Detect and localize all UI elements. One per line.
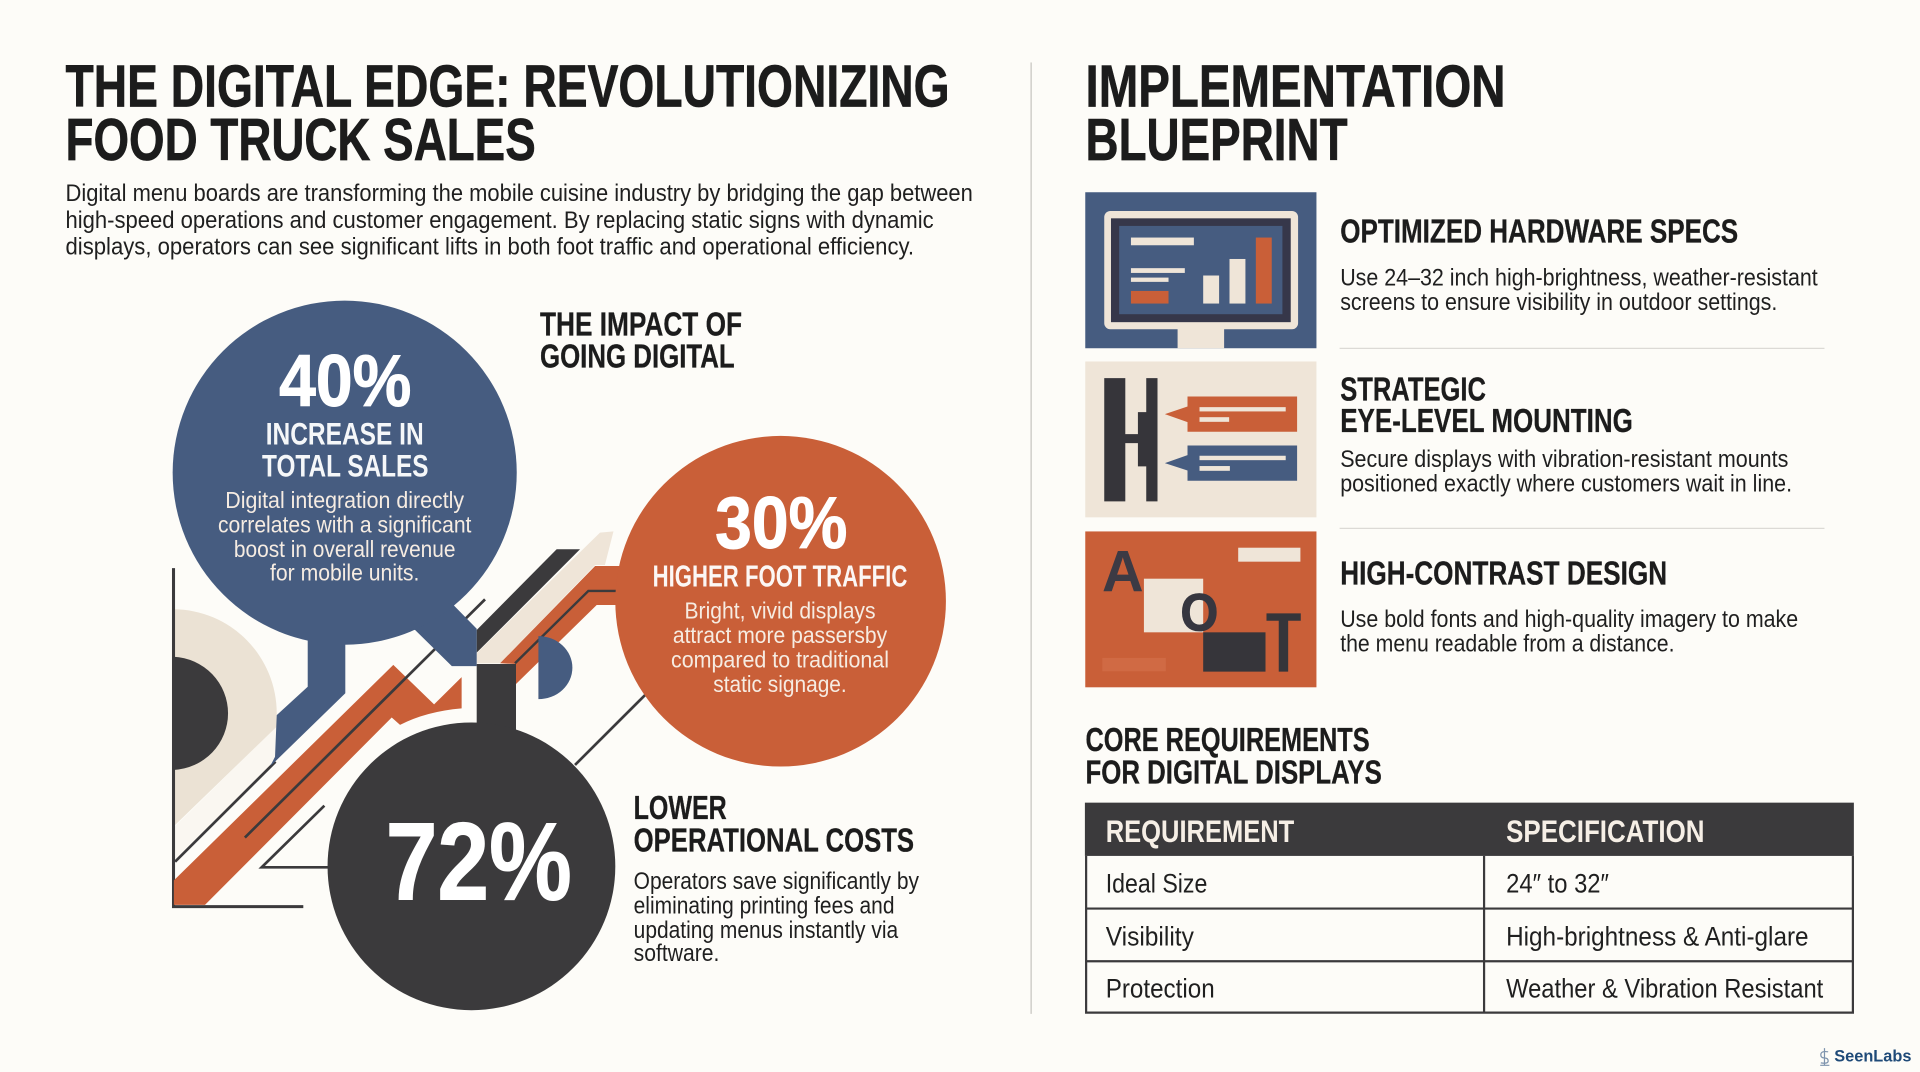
table header bbox=[1085, 803, 1854, 856]
axis lines bbox=[174, 568, 303, 907]
hardware specs text bbox=[1340, 213, 1818, 316]
row: visibility bbox=[1106, 921, 1809, 951]
stat description: Digital integration directly bbox=[225, 487, 464, 513]
stat description: static signage. bbox=[713, 671, 847, 697]
row: protection bbox=[1106, 973, 1824, 1003]
stat description: attract more passersby bbox=[673, 622, 887, 648]
design text: the menu readable from a distance. bbox=[1340, 630, 1674, 657]
stat label: INCREASE IN bbox=[266, 415, 424, 451]
30 percent value: 30% bbox=[715, 481, 847, 564]
thin line in orange band bbox=[515, 591, 618, 663]
40 percent value: 40% bbox=[279, 339, 411, 422]
mounting text: Secure displays with vibration-resistant mounts bbox=[1340, 446, 1788, 473]
stat label bbox=[262, 415, 429, 483]
hardware specs text: Use 24–32 inch high-brightness, weather-resistant bbox=[1340, 264, 1818, 291]
design text: Use bold fonts and high-quality imagery to make bbox=[1340, 606, 1798, 633]
blue bubble bbox=[270, 605, 477, 767]
row: ideal size bbox=[1106, 869, 1609, 899]
lower operational costs text: LOWER bbox=[634, 790, 727, 827]
stat: 30 percent bbox=[615, 436, 946, 767]
stat description: boost in overall revenue bbox=[234, 536, 456, 562]
hardware specs text: screens to ensure visibility in outdoor settings. bbox=[1340, 289, 1777, 316]
title: THE DIGITAL EDGE: REVOLUTIONIZING bbox=[66, 53, 950, 120]
cream band bbox=[477, 531, 613, 663]
logo icon bbox=[1820, 1048, 1829, 1065]
impact heading: GOING DIGITAL bbox=[540, 338, 735, 375]
row: visibility: Visibility bbox=[1106, 921, 1194, 951]
dark band bbox=[477, 549, 580, 653]
logo: SeenLabs: SeenLabs bbox=[1834, 1047, 1911, 1066]
mounting text: STRATEGIC bbox=[1340, 371, 1486, 408]
corner line bbox=[262, 806, 331, 867]
stat description bbox=[671, 597, 889, 697]
requirements heading: FOR DIGITAL DISPLAYS bbox=[1086, 755, 1382, 792]
hardware specs text: OPTIMIZED HARDWARE SPECS bbox=[1340, 213, 1738, 250]
lower operational costs text: updating menus instantly via bbox=[634, 917, 899, 944]
table header: SPECIFICATION bbox=[1506, 813, 1704, 849]
stat label: HIGHER FOOT TRAFFIC bbox=[653, 560, 907, 594]
impact graphic bbox=[173, 301, 946, 1010]
mounting text: EYE-LEVEL MOUNTING bbox=[1340, 403, 1633, 440]
stat description: correlates with a significant bbox=[218, 512, 472, 538]
stat description: compared to traditional bbox=[671, 646, 889, 672]
blueprint heading: IMPLEMENTATION bbox=[1086, 53, 1506, 120]
requirements heading: CORE REQUIREMENTS bbox=[1086, 722, 1370, 759]
lower operational costs text: Operators save significantly by bbox=[634, 868, 919, 895]
decorative geometric backdrop bbox=[174, 531, 645, 907]
lower operational costs text: software. bbox=[634, 940, 719, 967]
long diagonal lines bbox=[175, 599, 485, 862]
icon: monitor bbox=[1085, 192, 1316, 348]
impact heading: THE IMPACT OF bbox=[540, 307, 742, 344]
mounting text: positioned exactly where customers wait in line. bbox=[1340, 471, 1792, 498]
icon: high-contrast letters: A bbox=[1102, 539, 1144, 604]
stat label: TOTAL SALES bbox=[262, 447, 429, 483]
row: ideal size: Ideal Size bbox=[1106, 869, 1207, 899]
right column bbox=[1085, 53, 1854, 1013]
intro text: Digital menu boards are transforming the mobile cuisine industry by bridging the gap between bbox=[66, 180, 973, 207]
dark circle with neck bbox=[477, 664, 516, 735]
stat: 72 percent bbox=[328, 664, 615, 1010]
lower operational costs text: OPERATIONAL COSTS bbox=[634, 823, 914, 860]
orange rising band bbox=[174, 665, 462, 905]
72 percent value: 72% bbox=[386, 800, 572, 923]
requirements heading bbox=[1086, 722, 1382, 792]
row: ideal size: 24″ to 32″ bbox=[1506, 869, 1609, 899]
icon: high-contrast letters bbox=[1085, 531, 1316, 687]
pale band under ring bbox=[175, 726, 277, 862]
connector line bbox=[575, 695, 645, 765]
blueprint heading: BLUEPRINT bbox=[1086, 106, 1348, 173]
lower operational costs text: eliminating printing fees and bbox=[634, 892, 894, 919]
stat: 40 percent bbox=[173, 301, 517, 767]
left header bbox=[66, 53, 973, 261]
stat description bbox=[218, 487, 472, 585]
title: FOOD TRUCK SALES bbox=[66, 106, 536, 173]
intro text bbox=[66, 180, 973, 261]
title bbox=[66, 53, 950, 173]
requirements table bbox=[1085, 803, 1854, 1013]
design text: HIGH-CONTRAST DESIGN bbox=[1340, 556, 1667, 593]
design text bbox=[1340, 556, 1798, 657]
stat description: Bright, vivid displays bbox=[684, 597, 876, 623]
blueprint heading bbox=[1086, 53, 1506, 173]
dark half circle bbox=[174, 657, 228, 770]
intro text: displays, operators can see significant lifts in both foot traffic and operational efficiency. bbox=[66, 234, 914, 261]
lower operational costs text bbox=[634, 790, 919, 967]
table header: REQUIREMENT bbox=[1106, 813, 1295, 849]
mounting text bbox=[1340, 371, 1792, 498]
impact heading bbox=[540, 307, 742, 375]
stat description: for mobile units. bbox=[270, 559, 419, 585]
blue half disc bbox=[538, 636, 572, 699]
orange upper band bbox=[500, 566, 624, 684]
icon: eye-level mount bbox=[1085, 361, 1316, 517]
row: visibility: High-brightness & Anti-glare bbox=[1506, 921, 1809, 951]
intro text: high-speed operations and customer engagement. By replacing static signs with dynamic bbox=[66, 207, 934, 234]
row: protection: Protection bbox=[1106, 973, 1215, 1003]
icon: high-contrast letters: O bbox=[1180, 584, 1218, 643]
cream half ring bbox=[174, 609, 277, 827]
row: protection: Weather & Vibration Resistant bbox=[1506, 973, 1824, 1003]
orange circle bbox=[615, 436, 946, 767]
